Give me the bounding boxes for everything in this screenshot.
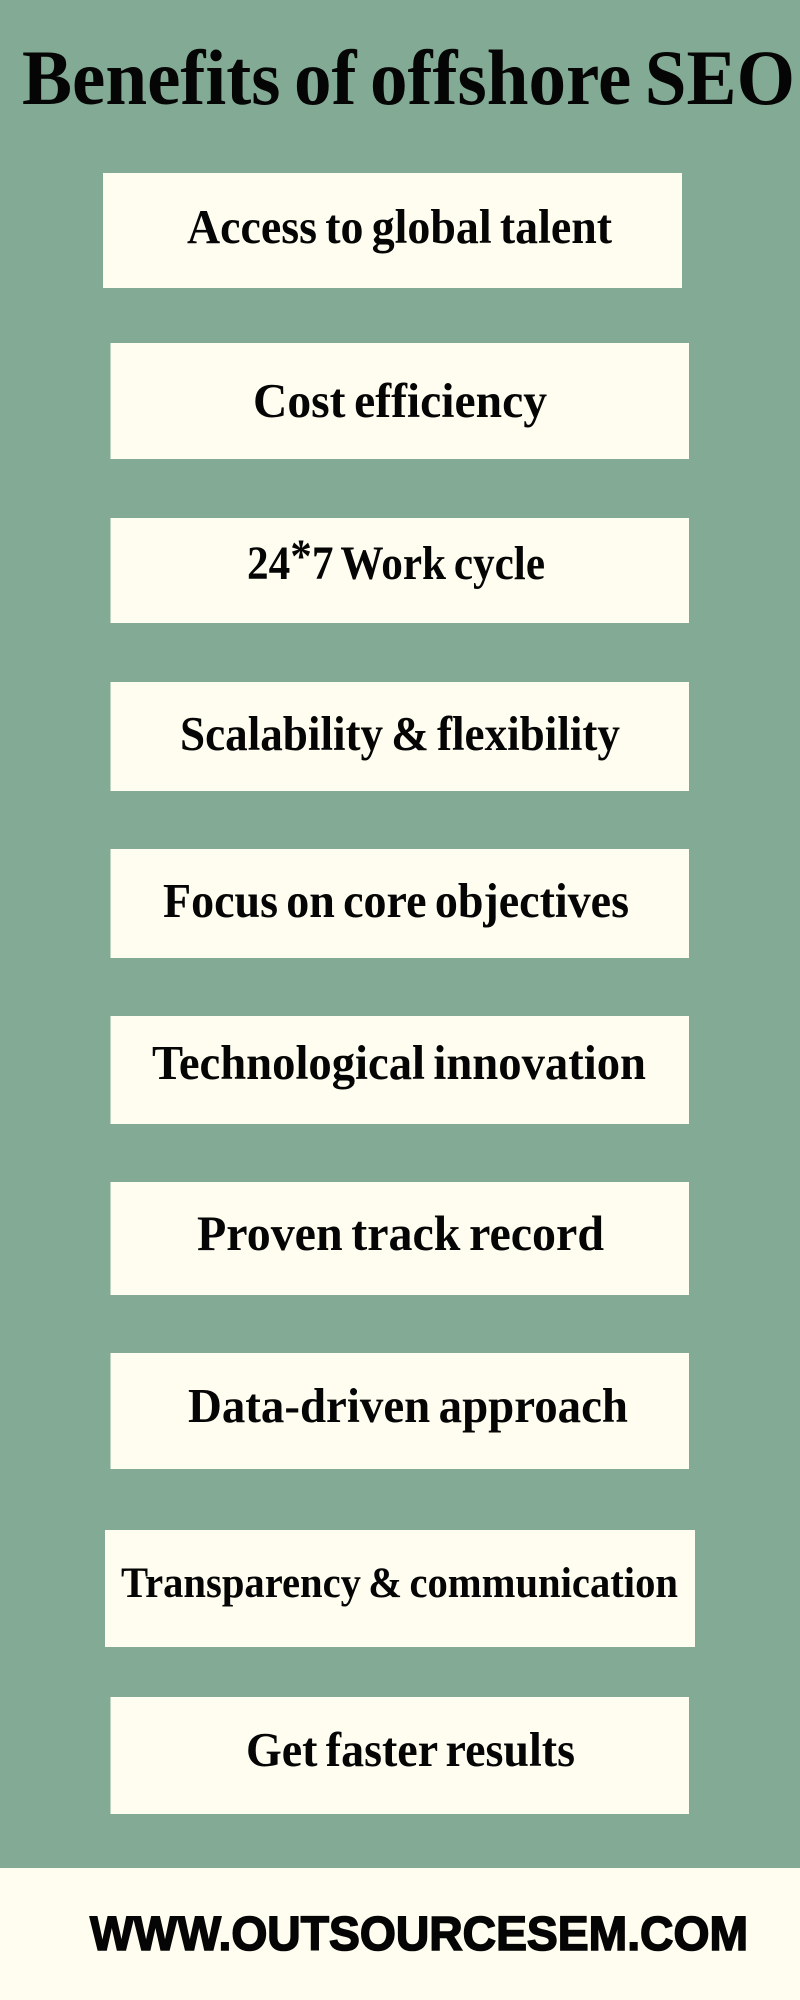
panel: cost efficiency: Cost efficiency: [253, 373, 547, 428]
panel: access to global talent: [103, 173, 682, 288]
panel: get faster results: [110, 1697, 689, 1814]
panel: data-driven approach: [110, 1353, 689, 1469]
panel: data-driven approach: Data-driven approach: [188, 1378, 628, 1433]
footer band with website: WWW.OUTSOURCESEM.COM: [90, 1908, 748, 1961]
panel: focus on core objectives: [110, 849, 689, 958]
panel: scalability and flexibility: Scalability & flexibility: [180, 706, 620, 761]
footer band with website: [0, 1868, 800, 2000]
panel: transparency and communication: [105, 1530, 695, 1647]
panel: cost efficiency: [110, 343, 689, 459]
panel: access to global talent: Access to global talent: [187, 199, 613, 254]
panel: 24*7 work cycle: 24: [247, 537, 295, 590]
panel: scalability and flexibility: [110, 682, 689, 791]
panel: get faster results: Get faster results: [246, 1722, 575, 1777]
panel: focus on core objectives: Focus on core objectives: [163, 873, 629, 928]
panel: proven track record: Proven track record: [197, 1205, 604, 1261]
panel: technological innovation: [110, 1016, 689, 1124]
panel: 24*7 work cycle: *: [290, 530, 312, 583]
panel: 24*7 work cycle: [110, 518, 689, 623]
panel: technological innovation: Technological innovation: [152, 1035, 646, 1090]
panel: proven track record: [110, 1182, 689, 1295]
panel: 24*7 work cycle: 7 Work cycle: [312, 537, 545, 590]
panel: transparency and communication: Transparency & communication: [121, 1560, 678, 1607]
